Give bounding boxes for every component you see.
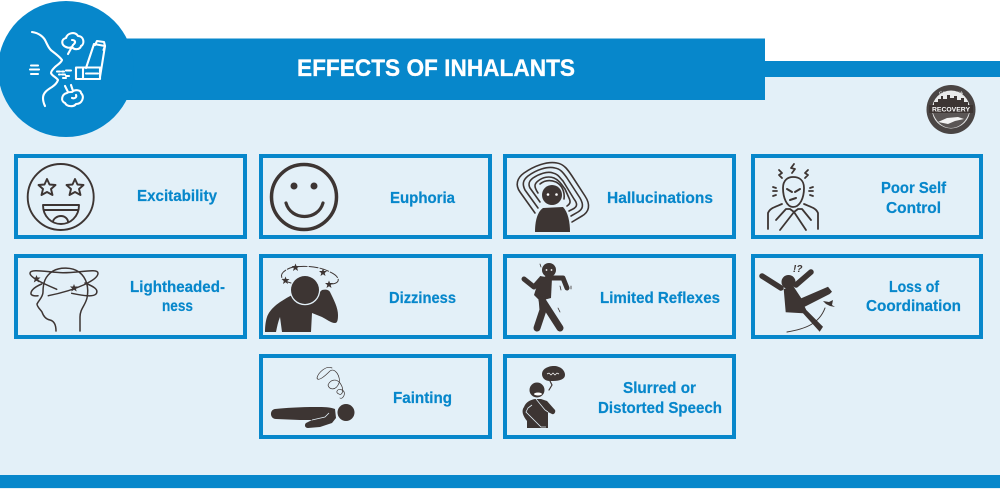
footer band xyxy=(0,475,1000,488)
label: Control xyxy=(886,200,941,217)
label xyxy=(598,380,722,417)
label: Poor Self xyxy=(881,180,947,197)
label: Fainting xyxy=(393,390,452,407)
panel: lightheadedness xyxy=(16,256,245,337)
logo: Carolina Recovery: RECOVERY xyxy=(932,106,971,114)
logo: Carolina Recovery xyxy=(926,85,976,134)
panel: dizziness xyxy=(261,256,490,337)
panel: loss of coordination xyxy=(753,256,981,337)
label: Coordination xyxy=(866,298,961,315)
logo: Carolina Recovery: CAROLINA xyxy=(939,90,963,95)
icon: person with swirling waves xyxy=(517,163,589,232)
label: Distorted Speech xyxy=(598,400,722,417)
icon: falling figure xyxy=(762,264,835,332)
label: Excitability xyxy=(137,188,217,205)
panel: excitability xyxy=(16,156,245,237)
label: Loss of xyxy=(889,279,940,296)
label: Slurred or xyxy=(623,380,696,397)
label: ness xyxy=(162,298,193,315)
panel: hallucinations xyxy=(505,156,734,237)
icon: falling figure: !? xyxy=(793,264,802,275)
label: Limited Reflexes xyxy=(600,290,720,307)
icon: inhaler and face xyxy=(30,32,105,106)
icon: dizzy person holding head xyxy=(265,264,338,332)
icon: stumbling figure xyxy=(524,263,571,328)
icon: star-eyed face xyxy=(28,164,94,230)
label: Euphoria xyxy=(390,190,455,207)
label: Lightheaded- xyxy=(130,279,225,296)
icon: angry person with bolts xyxy=(768,164,818,230)
icon: person lying down xyxy=(271,367,354,428)
label xyxy=(881,180,947,217)
title: EFFECTS OF INHALANTS xyxy=(297,55,575,82)
label xyxy=(130,279,225,315)
panel: fainting xyxy=(261,356,490,437)
label xyxy=(866,279,961,315)
panel: slurred or distorted speech xyxy=(505,356,734,437)
icon: person with speech bubble xyxy=(523,366,565,428)
icon: head with orbits and stars xyxy=(30,268,98,331)
icon: smiley face xyxy=(272,164,336,230)
panel: poor self control xyxy=(753,156,981,237)
label: Hallucinations xyxy=(607,190,713,207)
panel: euphoria xyxy=(261,156,490,237)
header banner xyxy=(0,1,1000,137)
label: Dizziness xyxy=(389,290,456,307)
panel: limited reflexes xyxy=(505,256,734,337)
